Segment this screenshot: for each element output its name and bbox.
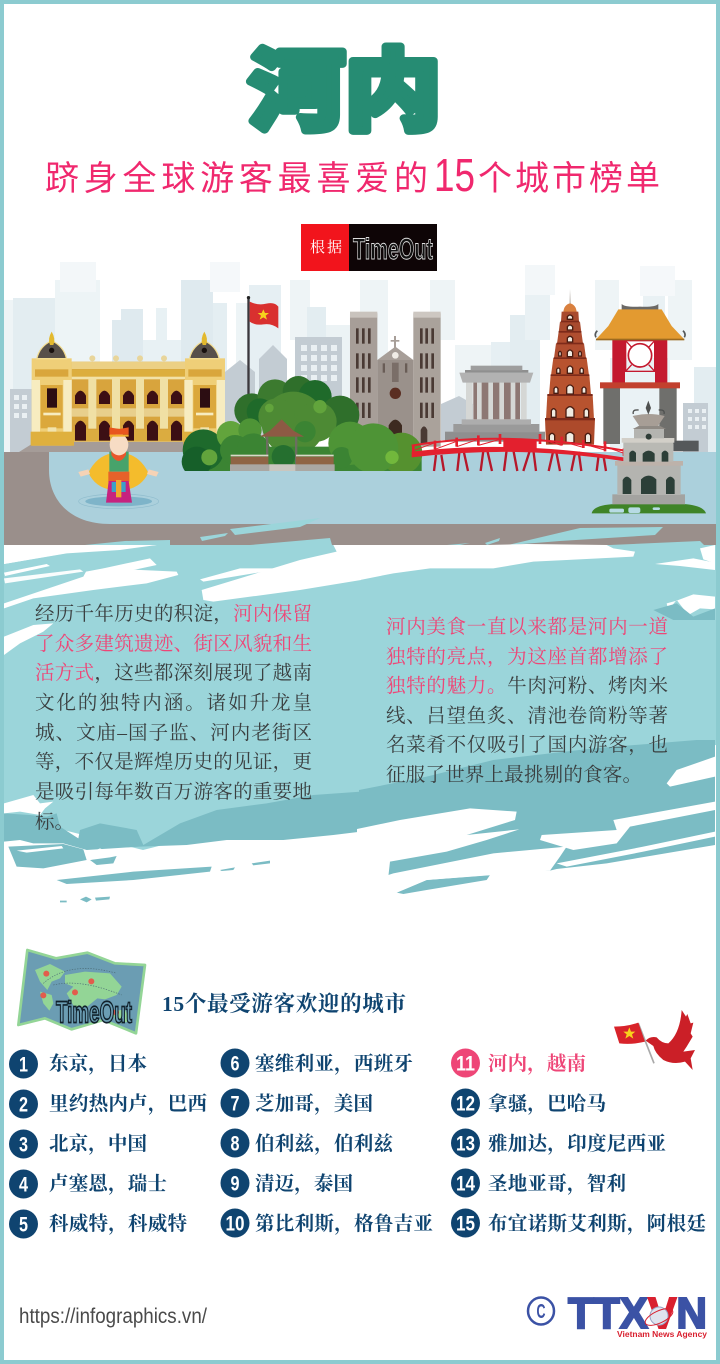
rank 14: 14 (456, 1172, 475, 1196)
rank 8 (220, 1128, 394, 1158)
rank 1 (9, 1050, 147, 1078)
rank 11 highlighted (451, 1048, 586, 1078)
ranking list: column 3 (451, 1048, 706, 1238)
title: 河内 (249, 21, 441, 148)
text block: cuisine paragraph: 河内美食一直以来都是河内一道 (386, 616, 668, 638)
rank 2 (9, 1090, 207, 1118)
logo: TTXVN Vietnam News Agency: Vietnam News Agency (617, 1329, 707, 1339)
text block: heritage paragraph: 文化的独特内涵。诸如升龙皇 (35, 692, 312, 714)
icon: copyright: C (536, 1301, 546, 1323)
rank 10 (220, 1208, 433, 1238)
text block: heritage paragraph: 是吸引每年数百万游客的重要地 (35, 781, 312, 803)
rank 13 (451, 1128, 666, 1158)
source badge: according to Time Out (301, 224, 437, 271)
rank 2: 2 (19, 1094, 28, 1116)
rank 3: 3 (19, 1134, 28, 1156)
rank 9: 清迈，泰国 (255, 1172, 353, 1195)
rank 8: 伯利兹，伯利兹 (255, 1132, 394, 1155)
rank 6 (220, 1048, 413, 1078)
text block: heritage paragraph: 活方式，这些都深刻展现了越南 (35, 662, 312, 684)
subtitle: 15 (434, 149, 475, 201)
background skyline (4, 262, 716, 452)
rank 10: 10 (226, 1212, 244, 1236)
source badge: according to Time Out: TimeOut (353, 233, 433, 266)
rank 10: 第比利斯，格鲁吉亚 (255, 1212, 433, 1235)
panel: brush stroke background (4, 544, 716, 902)
rank 7 (220, 1088, 373, 1118)
rank 3 (9, 1130, 147, 1158)
icon: copyright (528, 1298, 554, 1324)
rank 1: 1 (19, 1054, 28, 1076)
icon: St Joseph cathedral (350, 312, 441, 447)
icon: water puppet (78, 427, 159, 509)
text block: cuisine paragraph: 线、吕望鱼炙、清池卷筒粉等著 (386, 705, 668, 727)
icon: red Huc bridge (412, 434, 625, 471)
white brush gaps lower left (4, 795, 115, 860)
icon: Vietnamese flag on pole (247, 296, 278, 394)
rank 1: 东京，日本 (49, 1052, 147, 1075)
icon: opera house (31, 332, 225, 446)
rank 7: 7 (230, 1092, 240, 1116)
ground and lake (4, 442, 716, 545)
rank 9 (220, 1168, 353, 1198)
rank 12: 拿骚，巴哈马 (488, 1092, 606, 1115)
rank 4: 卢塞恩，瑞士 (49, 1172, 167, 1195)
rank 6: 6 (230, 1052, 240, 1076)
light brush layer (4, 545, 716, 850)
icon: trees and pavilion (182, 376, 422, 477)
rank 12 (451, 1088, 606, 1118)
rank 15: 布宜诺斯艾利斯，阿根廷 (488, 1212, 706, 1235)
rank 4: 4 (19, 1174, 28, 1196)
rank 14 (451, 1168, 626, 1198)
icon: Ho Chi Minh mausoleum (445, 366, 545, 442)
white brush gaps lower right (357, 757, 715, 893)
rank 5: 5 (19, 1214, 28, 1236)
icon: Turtle Tower (592, 401, 706, 513)
rank 11 highlighted: 11 (456, 1052, 475, 1076)
ranking list: column 1 (9, 1050, 207, 1238)
subtitle (45, 149, 660, 201)
text block: heritage paragraph: 标。 (35, 811, 74, 833)
subtitle: 跻身全球游客最喜爱的 (45, 151, 428, 200)
rank 13: 13 (456, 1132, 475, 1156)
text block: cuisine paragraph: 征服了世界上最挑剔的食客。 (386, 764, 642, 786)
icon: temple gate (595, 304, 699, 451)
footer url: https://infographics.vn/ (19, 1305, 207, 1328)
logo: TTXVN Vietnam News Agency: TTXVN (568, 1289, 707, 1338)
rank 12: 12 (456, 1092, 475, 1116)
rank 8: 8 (230, 1132, 240, 1156)
icon: dove with flag (614, 1010, 695, 1070)
rank 2: 里约热内卢，巴西 (49, 1092, 207, 1115)
rank 6: 塞维利亚，西班牙 (255, 1052, 413, 1075)
rank 7: 芝加哥，美国 (255, 1092, 373, 1115)
illustration: Hanoi landmarks (4, 262, 716, 545)
text block: heritage paragraph (35, 603, 312, 833)
text block: cuisine paragraph: 名菜肴不仅吸引了国内游客，也 (386, 734, 668, 756)
icon: Time Out world map: TimeOut (56, 996, 132, 1030)
text block: heritage paragraph: 经历千年历史的积淀，河内保留 (35, 603, 312, 625)
text block: cuisine paragraph (386, 616, 668, 786)
text block: cuisine paragraph: 独特的魅力。牛肉河粉、烤肉米 (386, 675, 668, 697)
rank 4 (9, 1170, 167, 1198)
brush marks on road (85, 518, 704, 545)
rank 14: 圣地亚哥，智利 (488, 1172, 626, 1195)
ranking list: column 2 (220, 1048, 433, 1238)
icon: Thien Mu pagoda (545, 289, 595, 445)
icon: Time Out world map (18, 950, 145, 1033)
rank 5 (9, 1210, 187, 1238)
text block: cuisine paragraph: 独特的亮点，为这座首都增添了 (386, 646, 668, 668)
heading: top 15 cities: 15个最受游客欢迎的城市 (162, 992, 406, 1016)
rank 15: 15 (456, 1212, 475, 1236)
rank 13: 雅加达，印度尼西亚 (488, 1132, 666, 1155)
white brush gaps upper left (4, 545, 361, 655)
rank 11 highlighted: 河内，越南 (488, 1052, 586, 1075)
source badge: according to Time Out: 根据 (310, 236, 342, 257)
text block: heritage paragraph: 了众多建筑遗迹、街区风貌和生 (35, 633, 312, 655)
rank 5: 科威特，科威特 (49, 1213, 187, 1235)
rank 15 (451, 1208, 706, 1238)
text block: heritage paragraph: 等，不仅是辉煌历史的见证，更 (35, 751, 312, 773)
rank 3: 北京，中国 (49, 1132, 147, 1155)
white brush gaps upper right (360, 544, 715, 620)
subtitle: 个城市榜单 (478, 151, 660, 200)
rank 9: 9 (230, 1172, 240, 1196)
dark brush layer (4, 792, 361, 902)
text block: heritage paragraph: 城、文庙–国子监、河内老街区 (35, 722, 312, 744)
